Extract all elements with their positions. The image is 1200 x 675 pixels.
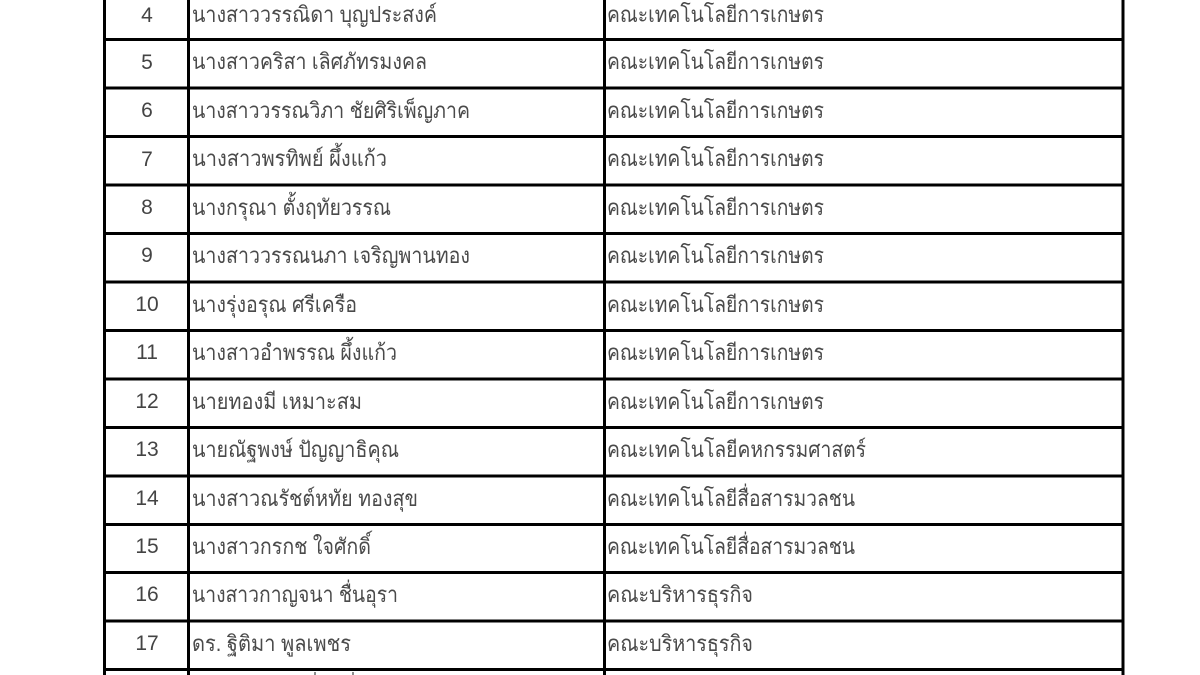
row 12 — [135, 389, 824, 414]
row 4: นางสาววรรณิดา บุญประสงค์ — [192, 2, 437, 28]
row 17 — [135, 631, 753, 657]
row 13: นายณัฐพงษ์ ปัญญาธิคุณ — [192, 437, 399, 463]
row 17: 17 — [135, 632, 159, 655]
row 7: คณะเทคโนโลยีการเกษตร — [607, 146, 824, 171]
row 8: 8 — [141, 196, 153, 219]
row 11: คณะเทคโนโลยีการเกษตร — [607, 340, 824, 365]
row 10: คณะเทคโนโลยีการเกษตร — [607, 292, 824, 317]
row 8 — [141, 192, 824, 221]
row 11: นางสาวอำพรรณ ผึ้งแก้ว — [192, 337, 397, 365]
row 16: คณะบริหารธุรกิจ — [607, 582, 753, 608]
row 4: คณะเทคโนโลยีการเกษตร — [607, 2, 824, 27]
row 15: นางสาวกรกช ใจศักดิ์ — [192, 531, 373, 559]
row 12: นายทองมี เหมาะสม — [192, 389, 362, 414]
row 17: คณะบริหารธุรกิจ — [607, 631, 753, 657]
row 13: คณะเทคโนโลยีคหกรรมศาสตร์ — [607, 437, 866, 462]
row 4 — [141, 2, 824, 28]
row 10 — [135, 292, 824, 318]
row 10: นางรุ่งอรุณ ศรีเครือ — [192, 292, 357, 318]
row 15: 15 — [135, 535, 159, 558]
row 6: คณะเทคโนโลยีการเกษตร — [607, 98, 824, 123]
row 9 — [141, 243, 824, 268]
row 8: นางกรุณา ตั้งฤทัยวรรณ — [192, 192, 391, 221]
row 11: 11 — [136, 341, 158, 364]
row 17: ดร. ฐิติมา พูลเพชร — [192, 631, 351, 657]
row 12: คณะเทคโนโลยีการเกษตร — [607, 389, 824, 414]
row 5: นางสาวคริสา เลิศภัทรมงคล — [192, 49, 427, 74]
row 9: นางสาววรรณนภา เจริญพานทอง — [192, 243, 470, 268]
row 7: นางสาวพรทิพย์ ผึ้งแก้ว — [192, 143, 387, 171]
row 7: 7 — [141, 148, 153, 171]
row 11 — [136, 337, 824, 365]
row 4: 4 — [141, 4, 153, 27]
row 9: 9 — [141, 244, 153, 267]
row 13: 13 — [135, 438, 159, 461]
row 12: 12 — [135, 390, 159, 413]
row 5: 5 — [141, 51, 153, 74]
row 16 — [135, 579, 753, 608]
row 14: 14 — [135, 487, 159, 510]
row 14 — [135, 483, 855, 512]
row 6 — [141, 96, 824, 123]
row 16: 16 — [135, 583, 159, 606]
row 16: นางสาวกาญจนา ชื่นอุรา — [192, 579, 398, 608]
row 5: คณะเทคโนโลยีการเกษตร — [607, 49, 824, 74]
row 10: 10 — [135, 293, 159, 316]
row 7 — [141, 143, 824, 171]
row 9: คณะเทคโนโลยีการเกษตร — [607, 243, 824, 268]
row 14: นางสาวณรัชต์หทัย ทองสุข — [192, 486, 418, 512]
row 5 — [141, 49, 824, 74]
row 14: คณะเทคโนโลยีสื่อสารมวลชน — [607, 483, 855, 511]
row 18: clipped tone marks at the page edge — [315, 672, 353, 675]
row 13 — [135, 437, 866, 463]
row 6: นางสาววรรณวิภา ชัยศิริเพ็ญภาค — [192, 96, 470, 123]
row 8: คณะเทคโนโลยีการเกษตร — [607, 195, 824, 220]
row 15 — [135, 531, 855, 559]
row 6: 6 — [141, 99, 153, 122]
row 15: คณะเทคโนโลยีสื่อสารมวลชน — [607, 531, 855, 559]
